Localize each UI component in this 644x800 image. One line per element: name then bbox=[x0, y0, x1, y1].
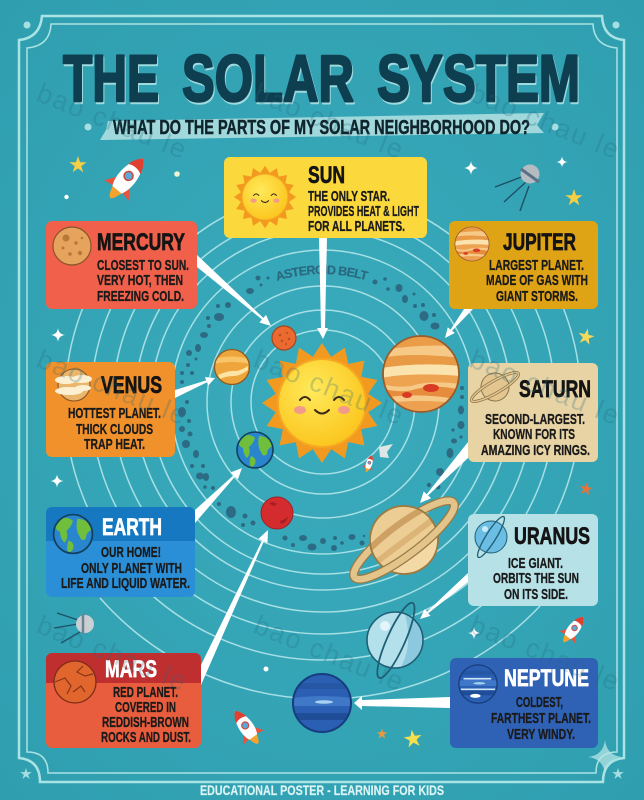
text: mars description: RED PLANET. bbox=[113, 684, 178, 701]
heading: venus: VENUS bbox=[101, 372, 162, 399]
text: neptune description bbox=[491, 694, 591, 743]
watermarks: bao chau le bbox=[466, 610, 623, 697]
icon: small rocket in orbit bbox=[361, 444, 393, 474]
text: neptune description: VERY WINDY. bbox=[507, 726, 575, 743]
arrow: mercury bbox=[197, 255, 271, 326]
text: sun description: PROVIDES HEAT & LIGHT bbox=[308, 203, 419, 220]
text: jupiter description: MADE OF GAS WITH bbox=[486, 272, 588, 289]
planet: earth bbox=[237, 432, 273, 468]
panel: sun bbox=[224, 157, 427, 238]
planet: jupiter bbox=[381, 336, 461, 414]
watermarks bbox=[33, 78, 623, 697]
text: uranus description: ON ITS SIDE. bbox=[504, 586, 568, 603]
text: uranus description: ICE GIANT. bbox=[508, 555, 563, 572]
text: uranus description bbox=[493, 555, 579, 603]
icon: saturn bbox=[465, 361, 525, 413]
panel: venus bbox=[46, 362, 175, 457]
panel: mercury bbox=[46, 221, 197, 309]
watermarks: bao chau le bbox=[466, 344, 623, 431]
icon: mars bbox=[54, 661, 96, 703]
text: ASTEROID BELT bbox=[277, 265, 369, 281]
planet: sun bbox=[262, 343, 382, 463]
panel: uranus bbox=[468, 514, 598, 606]
planet: venus bbox=[214, 350, 250, 384]
heading: saturn: SATURN bbox=[519, 376, 591, 403]
text: mars description: ROCKS AND DUST. bbox=[101, 729, 191, 746]
icon: satellite top right bbox=[495, 164, 540, 211]
watermarks: bao chau le bbox=[33, 610, 190, 697]
text: mars description bbox=[101, 684, 191, 746]
planet: mercury bbox=[272, 326, 296, 350]
title: THE bbox=[63, 41, 159, 115]
arrow: saturn bbox=[420, 442, 468, 503]
text: earth description: OUR HOME! bbox=[101, 544, 161, 561]
subtitle banner bbox=[100, 113, 544, 140]
watermarks: bao chau le bbox=[33, 344, 190, 431]
text: saturn description: AMAZING ICY RINGS. bbox=[481, 442, 590, 459]
text: venus description: HOTTEST PLANET. bbox=[68, 405, 161, 422]
title: SYSTEM bbox=[377, 41, 580, 115]
text: uranus description: ORBITS THE SUN bbox=[493, 570, 579, 587]
arrow: jupiter bbox=[445, 309, 473, 338]
text: sun description: THE ONLY STAR. bbox=[308, 188, 390, 205]
icon: satellite left bbox=[54, 613, 94, 643]
text: sun description: FOR ALL PLANETS. bbox=[308, 218, 405, 235]
arrow: earth bbox=[195, 468, 242, 523]
title: SOLAR bbox=[182, 41, 354, 115]
icon: earth bbox=[54, 515, 92, 553]
icon: uranus bbox=[474, 514, 508, 560]
text: saturn description: KNOWN FOR ITS bbox=[493, 426, 575, 443]
text: venus description: THICK CLOUDS bbox=[76, 421, 153, 438]
arrow: sun bbox=[317, 238, 328, 339]
planet: mars bbox=[261, 497, 293, 529]
planet: neptune bbox=[292, 674, 352, 732]
icon: rocket right bbox=[556, 611, 591, 648]
text: venus description bbox=[68, 405, 161, 453]
text: sun description bbox=[308, 188, 419, 235]
text: mercury description: VERY HOT, THEN bbox=[97, 272, 183, 289]
planet: uranus bbox=[367, 599, 423, 682]
icon: rocket top left bbox=[98, 148, 156, 208]
footer: EDUCATIONAL POSTER - LEARNING FOR KIDS bbox=[200, 782, 444, 798]
text: jupiter description: LARGEST PLANET. bbox=[489, 257, 584, 274]
icon: mercury bbox=[53, 227, 91, 265]
panel: earth bbox=[46, 507, 195, 597]
orbit rings bbox=[67, 216, 579, 698]
panel: jupiter bbox=[449, 221, 598, 309]
asteroid belt label bbox=[277, 274, 369, 281]
text: mars description: COVERED IN bbox=[115, 699, 176, 716]
text: mercury description: CLOSEST TO SUN. bbox=[97, 257, 189, 274]
text: earth description: LIFE AND LIQUID WATER. bbox=[61, 575, 190, 592]
text: mercury description: FREEZING COLD. bbox=[97, 288, 184, 305]
text: jupiter description: GIANT STORMS. bbox=[496, 288, 578, 305]
icon: jupiter bbox=[454, 227, 490, 262]
heading: sun: SUN bbox=[308, 162, 345, 189]
text: earth description bbox=[61, 544, 190, 592]
asteroid belt bbox=[178, 276, 464, 551]
watermarks: bao chau le bbox=[250, 344, 407, 431]
heading: neptune: NEPTUNE bbox=[504, 665, 589, 692]
arrow: venus bbox=[175, 377, 215, 398]
icon: venus bbox=[55, 369, 92, 401]
watermarks: bao chau le bbox=[250, 78, 407, 165]
watermarks: bao chau le bbox=[33, 78, 190, 165]
icon: neptune bbox=[458, 665, 498, 703]
heading: earth: EARTH bbox=[102, 514, 162, 541]
text: mars description: REDDISH-BROWN bbox=[102, 714, 189, 731]
text: neptune description: COLDEST, bbox=[516, 694, 563, 711]
panel: saturn bbox=[465, 361, 598, 462]
arrow: neptune bbox=[354, 696, 450, 710]
icon: sun bbox=[234, 166, 296, 228]
text: saturn description: SECOND-LARGEST. bbox=[485, 411, 585, 428]
heading: mercury: MERCURY bbox=[97, 229, 185, 256]
arrow: uranus bbox=[420, 573, 468, 619]
panel: mars bbox=[46, 653, 201, 748]
heading: jupiter: JUPITER bbox=[503, 229, 576, 256]
heading: mars: MARS bbox=[105, 656, 157, 683]
text: earth description: ONLY PLANET WITH bbox=[81, 560, 182, 577]
watermarks: bao chau le bbox=[466, 78, 623, 165]
heading: uranus: URANUS bbox=[514, 523, 590, 550]
title bbox=[63, 41, 580, 115]
planet: saturn bbox=[349, 496, 459, 584]
watermarks: bao chau le bbox=[250, 610, 407, 697]
text: saturn description bbox=[481, 411, 590, 459]
text: jupiter description bbox=[486, 257, 588, 305]
arrow: mars bbox=[201, 530, 268, 685]
panel: neptune bbox=[450, 658, 598, 748]
text: neptune description: FARTHEST PLANET. bbox=[491, 710, 591, 727]
text: venus description: TRAP HEAT. bbox=[84, 436, 145, 453]
text: mercury description bbox=[97, 257, 189, 305]
icon: rocket bottom bbox=[225, 704, 268, 751]
